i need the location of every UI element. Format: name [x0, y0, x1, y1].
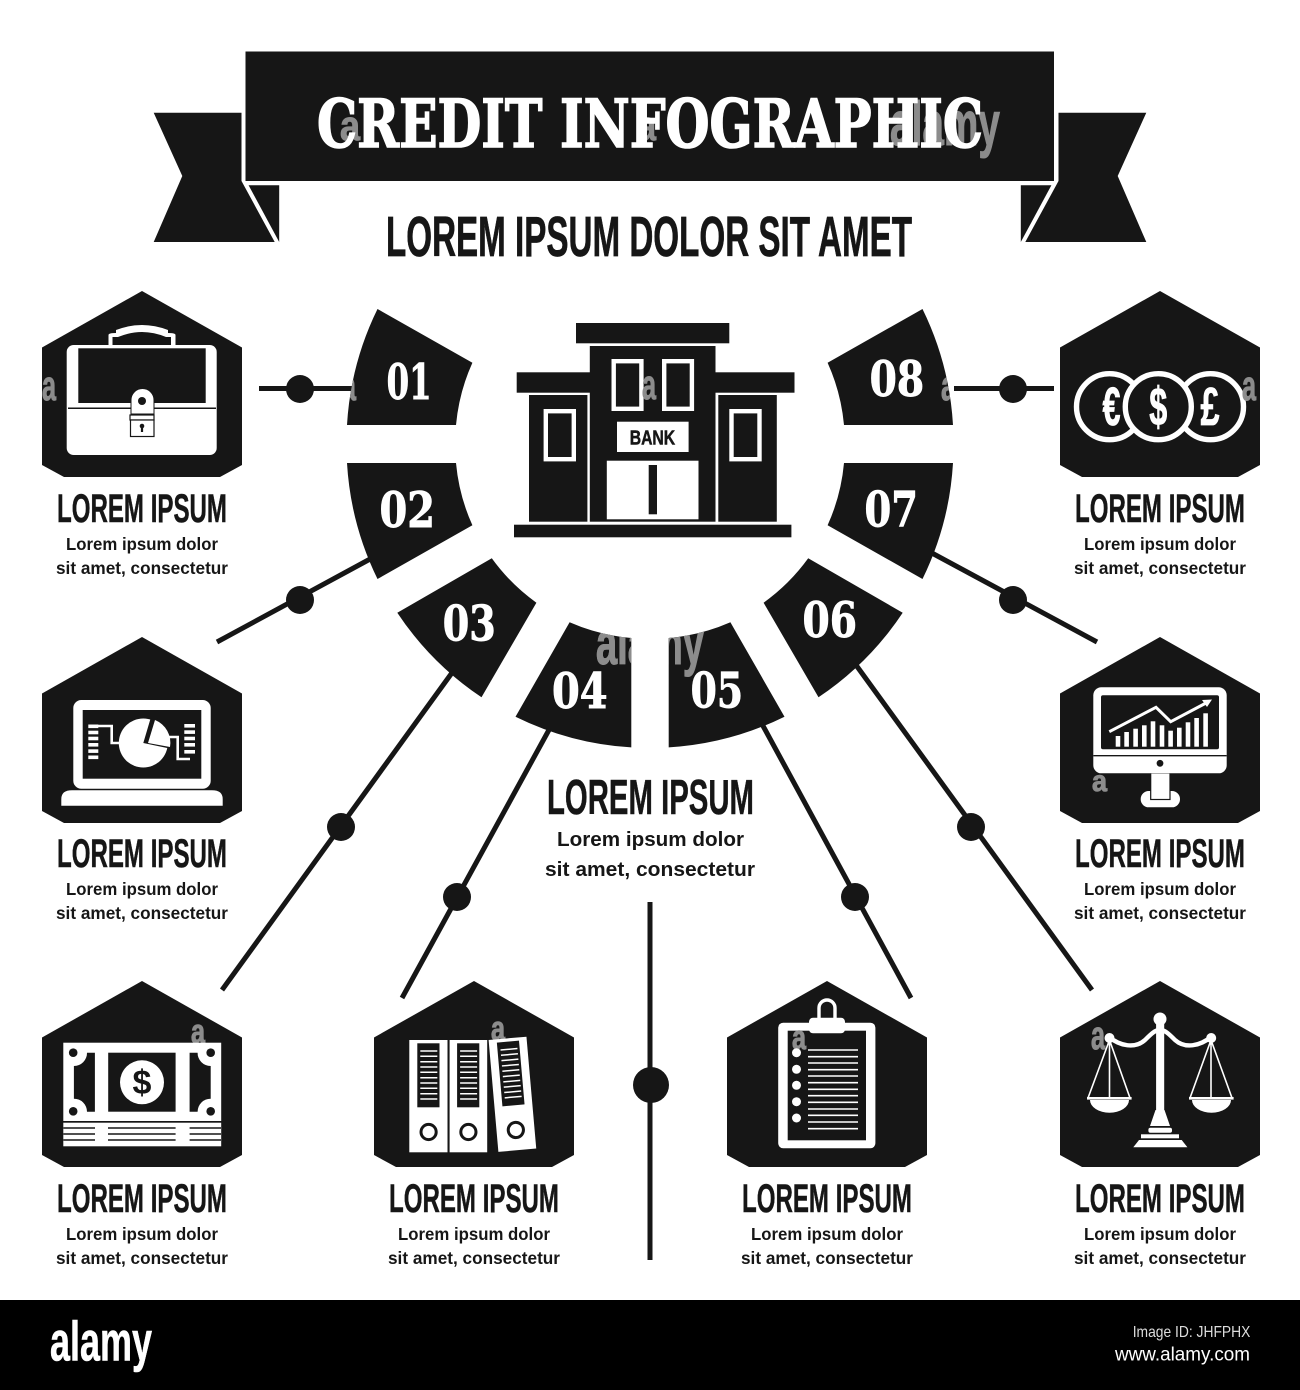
text block: column 4 row 3: Lorem ipsum dolor	[1084, 1224, 1236, 1244]
icon: bank building	[514, 323, 794, 537]
watermark on banner: a	[638, 102, 656, 149]
segment 05	[596, 610, 784, 747]
footer bar	[0, 1300, 1300, 1390]
icon: currency coins	[1076, 374, 1244, 440]
watermark on banner	[340, 90, 1000, 159]
text block: column 1 row 1: LOREM IPSUM	[57, 487, 227, 531]
panel: clipboard	[727, 981, 927, 1167]
segment 02: 02	[380, 481, 435, 539]
text block: column 1 row 3: LOREM IPSUM	[57, 1177, 227, 1221]
watermark over segments 01 and 08	[350, 378, 950, 401]
segment 07: 07	[864, 481, 918, 539]
text block: column 1 row 2: Lorem ipsum dolor	[66, 879, 218, 899]
segment 04: alamy	[596, 610, 704, 677]
text block: column 2 row 3	[388, 1177, 560, 1268]
watermark on coins panel: a	[1242, 362, 1256, 409]
text block: column 2 row 3: sit amet, consectetur	[388, 1248, 560, 1268]
segment 05: 05	[691, 662, 743, 720]
watermark on binders panel: a	[491, 1010, 506, 1048]
text block: column 4 row 1: Lorem ipsum dolor	[1084, 534, 1236, 554]
segment 08	[828, 309, 953, 425]
segment 08: 08	[870, 350, 924, 408]
segment 05: alamy	[596, 610, 704, 677]
connector lines	[217, 388, 1097, 1260]
watermark on banner: a	[340, 102, 361, 149]
text block: column 1 row 2	[56, 832, 228, 923]
panel: laptop	[42, 637, 242, 823]
icon: currency coins: £	[1200, 377, 1220, 437]
segment 04	[516, 610, 704, 747]
watermark over segments 01 and 08: a	[941, 362, 956, 409]
segment 02	[347, 463, 472, 579]
connector dots	[286, 375, 1027, 1103]
title banner	[154, 52, 1146, 242]
panel: coins	[1060, 291, 1260, 477]
icon: bank building: BANK	[630, 427, 676, 449]
segment 06	[764, 558, 903, 697]
icon: currency coins: $	[1149, 377, 1167, 437]
segment 06: 06	[802, 591, 857, 649]
text block: center: sit amet, consectetur	[545, 859, 755, 881]
panel: briefcase	[42, 291, 242, 477]
icon: laptop with pie chart	[61, 700, 223, 806]
watermark over segments 01 and 08: a	[341, 362, 356, 409]
icon: banknote stack: $	[133, 1064, 152, 1102]
text block: column 3 row 3: LOREM IPSUM	[742, 1177, 912, 1221]
text block: column 1 row 2: LOREM IPSUM	[57, 832, 227, 876]
footer url: www.alamy.com	[1114, 1344, 1250, 1366]
icon: briefcase	[67, 325, 217, 455]
text block: column 2 row 3: LOREM IPSUM	[389, 1177, 559, 1221]
text block: column 4 row 2: sit amet, consectetur	[1074, 903, 1246, 923]
segment 03	[397, 558, 536, 697]
text block: column 3 row 3: Lorem ipsum dolor	[751, 1224, 903, 1244]
icon: monitor with growth chart	[1093, 687, 1227, 807]
segment 03: 03	[443, 594, 496, 652]
subtitle: LOREM IPSUM DOLOR SIT AMET	[386, 205, 912, 269]
watermark on scales panel: a	[1091, 1014, 1105, 1058]
text block: column 4 row 2: Lorem ipsum dolor	[1084, 879, 1236, 899]
segment 01	[347, 309, 472, 425]
text block: column 1 row 2: sit amet, consectetur	[56, 903, 228, 923]
ribbon main panel	[246, 52, 1054, 181]
text block: column 1 row 3: sit amet, consectetur	[56, 1248, 228, 1268]
icon: clipboard checklist	[778, 1000, 875, 1148]
segment 04: 04	[552, 662, 608, 720]
ring segments with numbers	[341, 309, 956, 747]
ribbon tail right	[1021, 113, 1146, 242]
panel: binders	[374, 981, 574, 1167]
ribbon tail left	[154, 113, 279, 242]
watermark on banner: alamy	[890, 90, 1000, 159]
icon: banknote stack	[63, 1043, 221, 1146]
panel: money	[42, 981, 242, 1167]
watermark on briefcase panel: a	[42, 362, 56, 409]
text block: column 4 row 2	[1074, 832, 1246, 923]
text block: center: LOREM IPSUM	[547, 771, 754, 825]
text block: column 1 row 3	[56, 1177, 228, 1268]
text block: column 1 row 3: Lorem ipsum dolor	[66, 1224, 218, 1244]
watermark on clipboard: a	[792, 1019, 807, 1057]
watermark on money panel: a	[191, 1013, 206, 1051]
text block: column 1 row 1: sit amet, consectetur	[56, 558, 228, 578]
text block: column 1 row 1: Lorem ipsum dolor	[66, 534, 218, 554]
panel: scales	[1060, 981, 1260, 1167]
watermark on bank: a	[642, 361, 656, 408]
text block: column 3 row 3: sit amet, consectetur	[741, 1248, 913, 1268]
text block: center: Lorem ipsum dolor	[557, 829, 744, 851]
panel: monitor	[1060, 637, 1260, 823]
text block: column 3 row 3	[741, 1177, 913, 1268]
text block: column 4 row 3: sit amet, consectetur	[1074, 1248, 1246, 1268]
text block: center	[545, 771, 755, 881]
text block: column 4 row 1	[1074, 487, 1246, 578]
title text: CREDIT INFOGRAPHIC	[317, 85, 983, 163]
icon: scales of justice	[1087, 1012, 1234, 1147]
segment 07	[828, 463, 953, 579]
text block: column 1 row 1	[56, 487, 228, 578]
text block: column 2 row 3: Lorem ipsum dolor	[398, 1224, 550, 1244]
icon: binders	[409, 1037, 536, 1152]
segment 01: 01	[387, 353, 432, 411]
footer logo: alamy	[50, 1310, 152, 1372]
text block: column 4 row 1: sit amet, consectetur	[1074, 558, 1246, 578]
text block: column 4 row 3	[1074, 1177, 1246, 1268]
footer image id: Image ID: JHFPHX	[1133, 1324, 1251, 1341]
watermark on monitor panel: a	[1092, 765, 1107, 798]
icon: currency coins: €	[1102, 377, 1120, 437]
